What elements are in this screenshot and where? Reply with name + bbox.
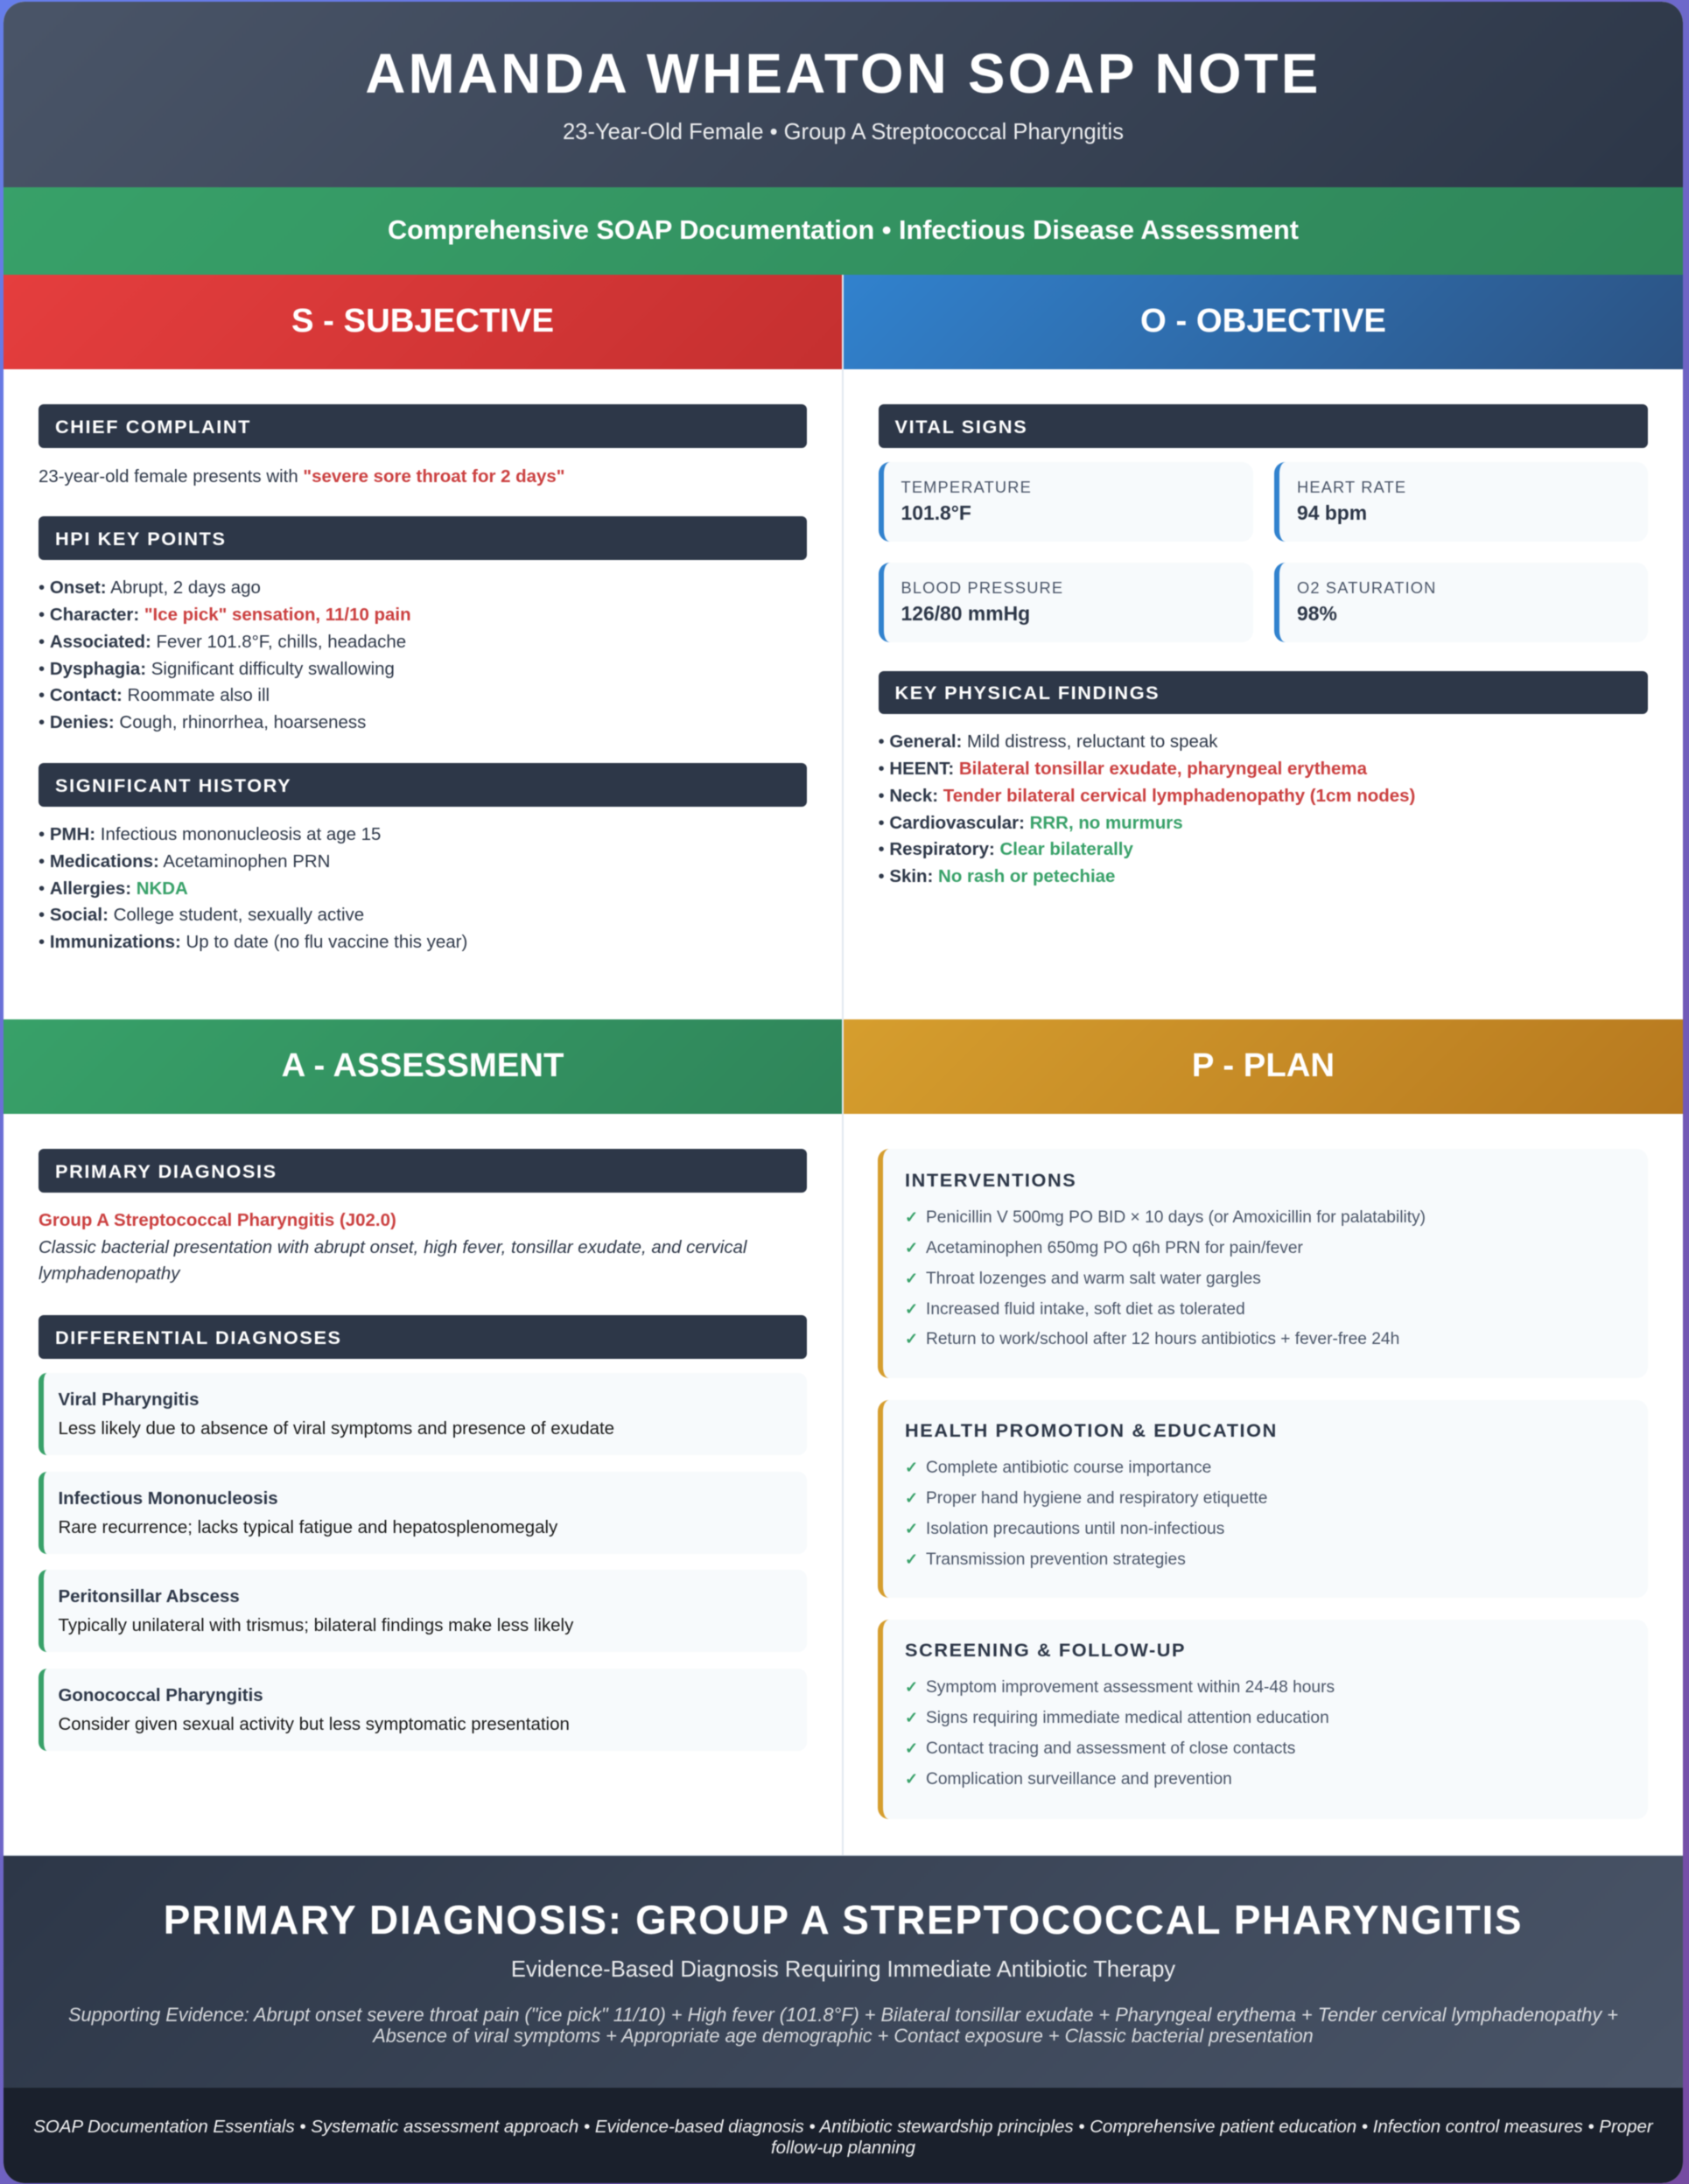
plan card: interventions: Throat lozenges and warm salt water gargles	[926, 1269, 1261, 1288]
differential: infectious mononucleosis	[39, 1472, 807, 1554]
list: physical findings: • Skin: No rash or petechiae	[879, 866, 1115, 886]
vital: heart rate: HEART RATE	[1297, 478, 1406, 495]
list: significant history: • Social: College student, sexually active	[39, 905, 364, 925]
list: hpi key points: • Denies: Cough, rhinorrhea, hoarseness	[39, 712, 366, 732]
plan card: health promotion: ✓	[905, 1519, 918, 1538]
plan card: screening: Complication surveillance and prevention	[926, 1770, 1232, 1788]
differential: infectious mononucleosis: Infectious Mononucleosis	[58, 1488, 278, 1508]
section heading: subjective: S - SUBJECTIVE	[291, 302, 554, 340]
list: significant history: • PMH: Infectious mononucleosis at age 15	[39, 824, 381, 844]
plan card: interventions: INTERVENTIONS	[905, 1169, 1076, 1190]
title: AMANDA WHEATON SOAP NOTE	[365, 43, 1321, 105]
list: physical findings: • Neck: Tender bilateral cervical lymphadenopathy (1cm nodes)	[879, 786, 1415, 806]
list: significant history	[39, 824, 467, 952]
list: significant history: • Immunizations: Up to date (no flu vaccine this year)	[39, 932, 467, 952]
plan card: interventions: ✓	[905, 1330, 918, 1348]
plan card: health promotion: HEALTH PROMOTION & EDUCATION	[905, 1419, 1278, 1441]
list: physical findings: • Cardiovascular: RRR, no murmurs	[879, 812, 1183, 833]
text: primary diagnosis: Group A Streptococcal Pharyngitis (J02.0)	[39, 1210, 396, 1230]
summary title: PRIMARY DIAGNOSIS: GROUP A STREPTOCOCCAL PHARYNGITIS	[164, 1897, 1523, 1942]
plan card: screening: ✓	[905, 1770, 918, 1788]
vital: temperature	[879, 462, 1253, 542]
footer text: SOAP Documentation Essentials • Systematic assessment approach • Evidence-based diagnosis • Antibiotic stewardship principles • Comprehensive patient education • Infection control measures • Proper	[33, 2117, 1653, 2137]
footer text: follow-up planning	[771, 2138, 915, 2158]
plan card: interventions: Acetaminophen 650mg PO q6h PRN for pain/fever	[926, 1239, 1303, 1256]
list: hpi key points	[39, 578, 411, 732]
section heading: plan: P - PLAN	[1192, 1046, 1335, 1084]
heading: vital signs	[879, 404, 1648, 448]
plan card: interventions: ✓	[905, 1269, 918, 1288]
text: primary diagnosis: Classic bacterial presentation with abrupt onset, high fever, tonsillar exudate, and cervical	[39, 1237, 746, 1257]
list: physical findings: • HEENT: Bilateral tonsillar exudate, pharyngeal erythema	[879, 759, 1367, 779]
vital: blood pressure: 126/80 mmHg	[901, 602, 1030, 625]
heading: chief complaint	[39, 404, 807, 448]
panel: subjective	[3, 274, 843, 952]
differential: peritonsillar abscess	[39, 1570, 807, 1652]
differential: viral pharyngitis: Viral Pharyngitis	[58, 1390, 200, 1410]
plan card: screening: Signs requiring immediate medical attention education	[926, 1709, 1329, 1727]
plan card: health promotion: Complete antibiotic course importance	[926, 1458, 1211, 1477]
plan card: screening: SCREENING & FOLLOW-UP	[905, 1639, 1186, 1661]
footer text	[33, 2117, 1654, 2158]
plan card: screening: ✓	[905, 1678, 918, 1697]
differential: infectious mononucleosis: Rare recurrence; lacks typical fatigue and hepatosplenomegaly	[58, 1517, 557, 1536]
vital: o2 saturation: O2 SATURATION	[1297, 578, 1437, 597]
text: primary diagnosis	[39, 1210, 747, 1284]
vital: o2 saturation: 98%	[1297, 602, 1337, 625]
plan card: screening: Symptom improvement assessment within 24-48 hours	[926, 1678, 1335, 1697]
differential: gonococcal pharyngitis: Consider given sexual activity but less symptomatic presentation	[58, 1713, 570, 1734]
differential: peritonsillar abscess: Peritonsillar Abscess	[58, 1586, 240, 1606]
plan card: interventions: ✓	[905, 1208, 918, 1227]
vital: o2 saturation	[1274, 563, 1648, 642]
plan card: interventions: Increased fluid intake, soft diet as tolerated	[926, 1300, 1245, 1318]
plan card: interventions: Penicillin V 500mg PO BID × 10 days (or Amoxicillin for palatability)	[926, 1208, 1426, 1227]
differential: viral pharyngitis: Less likely due to absence of viral symptoms and presence of exudate	[58, 1418, 614, 1438]
heading: differential diagnoses: DIFFERENTIAL DIAGNOSES	[55, 1326, 342, 1348]
header	[4, 2, 1683, 187]
section heading: assessment	[4, 1019, 842, 1114]
vital: blood pressure: BLOOD PRESSURE	[901, 578, 1063, 597]
section heading: objective: O - OBJECTIVE	[1140, 302, 1386, 340]
heading: primary diagnosis	[39, 1149, 807, 1193]
plan card: health promotion: Transmission prevention strategies	[926, 1550, 1186, 1569]
summary panel	[4, 1855, 1683, 2088]
summary subtitle: Evidence-Based Diagnosis Requiring Immediate Antibiotic Therapy	[511, 1957, 1175, 1982]
list: hpi key points: • Contact: Roommate also ill	[39, 685, 270, 705]
subtitle: 23-Year-Old Female • Group A Streptococcal Pharyngitis	[563, 120, 1124, 144]
supporting evidence: Supporting Evidence: Abrupt onset severe throat pain ("ice pick" 11/10) + High fever (101.8°F) + Bilateral tonsillar exudate + Pharyngeal erythema + Tender cervical lymphadenopathy +	[68, 2004, 1618, 2026]
plan card: screening: ✓	[905, 1709, 918, 1727]
text: primary diagnosis: lymphadenopathy	[39, 1264, 179, 1284]
footer	[4, 2088, 1683, 2183]
heading: chief complaint: CHIEF COMPLAINT	[55, 416, 251, 438]
text: chief complaint: 23-year-old female presents with "severe sore throat for 2 days"	[39, 466, 564, 486]
section heading: subjective	[4, 275, 842, 369]
heading: key physical findings: KEY PHYSICAL FINDINGS	[894, 682, 1160, 704]
list: physical findings: • Respiratory: Clear bilaterally	[879, 839, 1133, 859]
section heading: assessment: A - ASSESSMENT	[282, 1046, 564, 1084]
plan card: health promotion: ✓	[905, 1550, 918, 1569]
list: significant history: • Medications: Acetaminophen PRN	[39, 851, 330, 872]
vital: heart rate: 94 bpm	[1297, 500, 1367, 523]
vital: blood pressure	[879, 563, 1253, 642]
heading: significant history: SIGNIFICANT HISTORY	[55, 774, 291, 796]
plan card: health promotion: ✓	[905, 1489, 918, 1507]
plan card: health promotion	[878, 1400, 1648, 1598]
plan card: screening: Contact tracing and assessment of close contacts	[926, 1740, 1295, 1758]
plan card: screening	[878, 1620, 1648, 1819]
banner	[4, 187, 1683, 275]
heading: significant history	[39, 763, 807, 807]
plan card: interventions	[878, 1149, 1648, 1378]
list: hpi key points: • Dysphagia: Significant difficulty swallowing	[39, 658, 395, 679]
vital: heart rate	[1274, 462, 1648, 542]
vital: temperature: TEMPERATURE	[901, 478, 1032, 495]
panel: plan	[843, 1018, 1684, 1820]
differential: gonococcal pharyngitis: Gonococcal Pharyngitis	[58, 1685, 263, 1704]
divider	[842, 275, 844, 1855]
plan card: interventions: ✓	[905, 1239, 918, 1256]
supporting evidence: Absence of viral symptoms + Appropriate age demographic + Contact exposure + Classic bacterial presentation	[373, 2025, 1314, 2047]
heading: hpi key points: HPI KEY POINTS	[55, 528, 227, 550]
list: significant history: • Allergies: NKDA	[39, 878, 188, 899]
panel: objective	[843, 274, 1684, 886]
section heading: plan	[844, 1019, 1683, 1114]
plan card: screening: ✓	[905, 1740, 918, 1758]
list: physical findings	[879, 732, 1416, 886]
heading: key physical findings	[879, 671, 1648, 714]
list: hpi key points: • Onset: Abrupt, 2 days ago	[39, 578, 261, 598]
list: physical findings: • General: Mild distress, reluctant to speak	[879, 732, 1217, 752]
banner: Comprehensive SOAP Documentation • Infectious Disease Assessment	[388, 215, 1299, 245]
plan card: interventions: Return to work/school after 12 hours antibiotics + fever-free 24h	[926, 1330, 1399, 1348]
list: hpi key points: • Character: "Ice pick" sensation, 11/10 pain	[39, 605, 411, 625]
differential: viral pharyngitis	[39, 1373, 807, 1455]
plan card: health promotion: Proper hand hygiene and respiratory etiquette	[926, 1489, 1267, 1507]
plan card: health promotion: Isolation precautions until non-infectious	[926, 1519, 1224, 1538]
supporting evidence	[68, 2004, 1618, 2048]
plan card: health promotion: ✓	[905, 1458, 918, 1477]
list: hpi key points: • Associated: Fever 101.8°F, chills, headache	[39, 632, 406, 652]
plan card: interventions: ✓	[905, 1300, 918, 1318]
section heading: objective	[844, 275, 1683, 369]
heading: differential diagnoses	[39, 1315, 807, 1359]
heading: primary diagnosis: PRIMARY DIAGNOSIS	[55, 1160, 277, 1182]
panel: assessment	[3, 1018, 843, 1752]
vital: temperature: 101.8°F	[901, 500, 971, 523]
heading: hpi key points	[39, 516, 807, 560]
differential: peritonsillar abscess: Typically unilateral with trismus; bilateral findings make less likely	[58, 1615, 573, 1635]
heading: vital signs: VITAL SIGNS	[894, 416, 1027, 438]
differential: gonococcal pharyngitis	[39, 1668, 807, 1750]
